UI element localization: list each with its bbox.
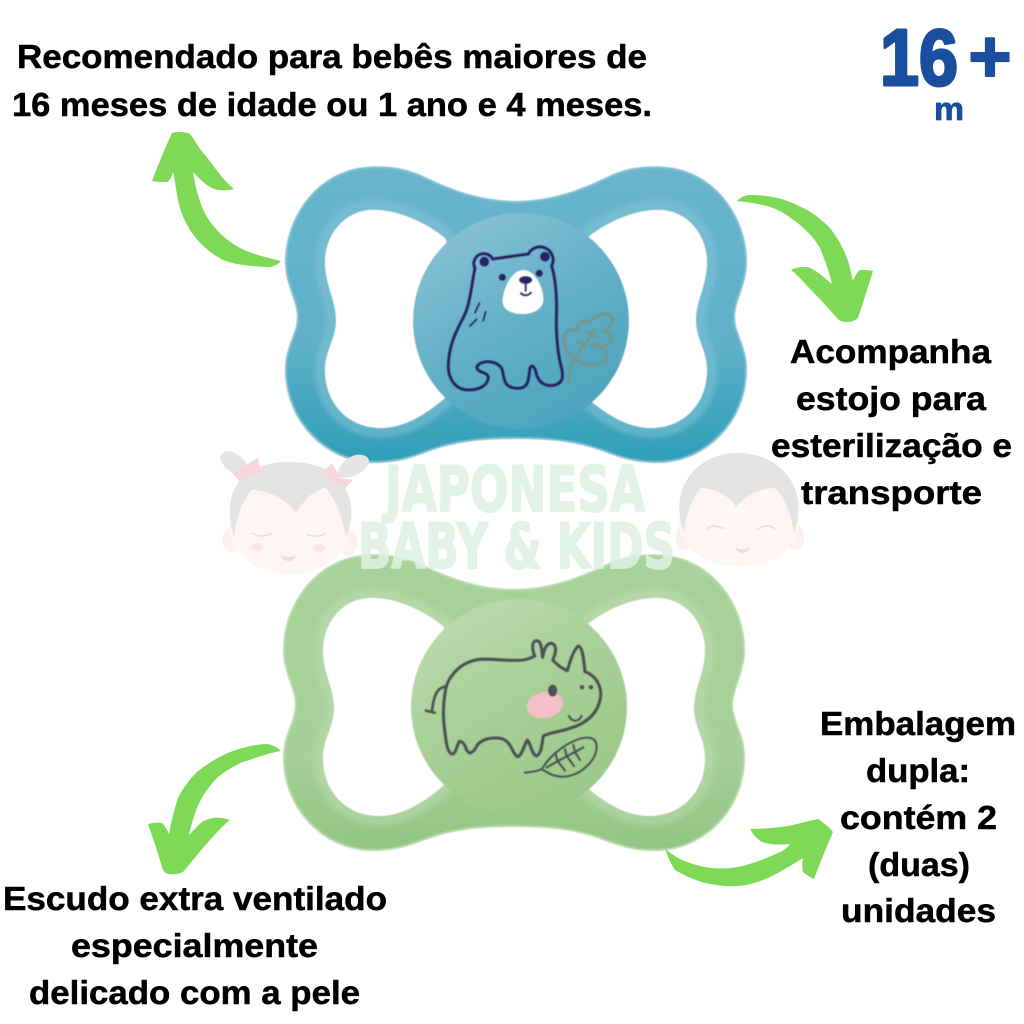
green disc — [411, 599, 627, 815]
text: ventilated shield: Escudo extra ventilado — [3, 880, 387, 917]
green ring right opening — [550, 598, 705, 816]
badge: 16+ months: 16 — [880, 13, 958, 102]
arrow: bottom right — [665, 819, 833, 886]
text: case included: transporte — [801, 474, 982, 511]
arrow: top right — [737, 195, 873, 322]
text: age recommendation: 16 meses de idade ou 1 ano e 4 meses. — [12, 86, 652, 123]
badge: 16+ months: + — [968, 15, 1012, 98]
icon: rhino — [426, 641, 601, 777]
pacifier: blue with bear — [286, 167, 746, 462]
arrow: bottom left — [148, 744, 281, 874]
green ring left opening — [323, 598, 478, 816]
arrow: top left — [152, 132, 281, 267]
text: case included: Acompanha — [790, 333, 992, 370]
blue ring — [286, 167, 746, 462]
text: case included — [771, 333, 1012, 511]
watermark text: BABY & KIDS — [358, 510, 675, 583]
text: ventilated shield — [3, 880, 387, 1011]
text: double pack: contém 2 — [840, 799, 997, 836]
blue disc — [413, 213, 629, 429]
text: age recommendation — [12, 38, 652, 123]
text: case included: estojo para — [796, 380, 987, 417]
icon: leaf on green disc — [525, 738, 597, 777]
text: case included: esterilização e — [771, 427, 1012, 464]
blue ring bevels — [325, 210, 707, 428]
pacifier: green with rhino — [284, 555, 744, 850]
icon: girl face — [220, 451, 369, 574]
text: double pack: dupla: — [866, 752, 970, 789]
blue ring left opening — [325, 210, 480, 428]
text: ventilated shield: delicado com a pele — [29, 974, 360, 1011]
icon: bear — [448, 247, 563, 390]
text: age recommendation: Recomendado para bebês maiores de — [17, 38, 647, 75]
text: double pack: Embalagem — [820, 705, 1016, 742]
blue ring right opening — [552, 210, 707, 428]
watermark: Japonesa Baby & Kids — [220, 451, 804, 583]
text: double pack: unidades — [841, 892, 996, 929]
watermark text: JAPONESA — [382, 453, 645, 526]
green ring — [284, 555, 744, 850]
text: ventilated shield: especialmente — [71, 927, 318, 964]
text: double pack: (duas) — [868, 846, 970, 883]
badge: 16+ months: m — [934, 91, 964, 127]
watermark text — [358, 453, 675, 583]
icon: leaf on blue disc — [564, 314, 612, 382]
badge: 16+ months — [880, 13, 1012, 127]
text: double pack — [820, 705, 1016, 929]
green ring bevels — [323, 598, 705, 816]
icon: boy face — [676, 453, 804, 567]
